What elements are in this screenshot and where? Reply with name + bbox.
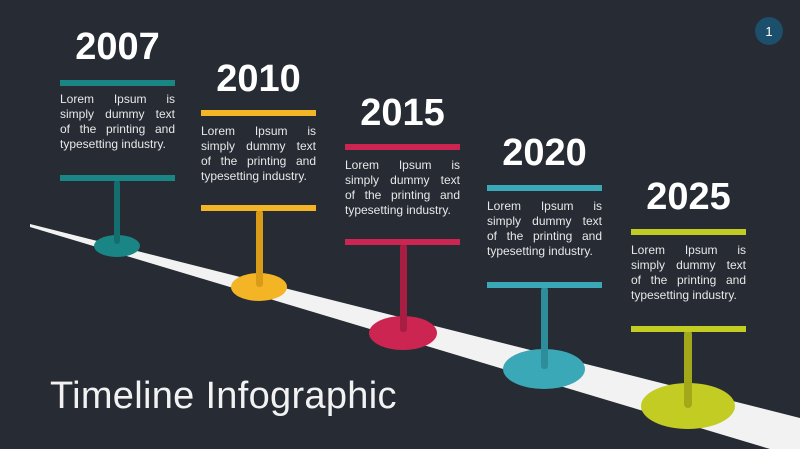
- page badge: [755, 17, 783, 45]
- column 2010: simply dummy text: [201, 139, 316, 153]
- column 2007: simply dummy text: [60, 107, 175, 121]
- page badge: 1: [765, 24, 773, 39]
- column 2015: 2015: [360, 92, 445, 134]
- column 2010: 2010: [216, 58, 301, 100]
- column 2015: typesetting industry.: [345, 203, 451, 217]
- column 2025: of the printing and: [631, 273, 746, 287]
- column 2010: typesetting industry.: [201, 169, 307, 183]
- column 2020: of the printing and: [487, 229, 602, 243]
- column 2020: simply dummy text: [487, 214, 602, 228]
- column 2007: [60, 26, 175, 181]
- column 2007: 2007: [75, 26, 160, 68]
- column 2007: of the printing and: [60, 122, 175, 136]
- column 2015: simply dummy text: [345, 173, 460, 187]
- column 2025: Lorem Ipsum is: [631, 243, 746, 257]
- marker 2007: [94, 180, 140, 257]
- column 2007: typesetting industry.: [60, 137, 166, 151]
- column 2007: Lorem Ipsum is: [60, 92, 175, 106]
- column 2025: [631, 176, 746, 332]
- road: [30, 224, 800, 449]
- column 2020: typesetting industry.: [487, 244, 593, 258]
- column 2015: [345, 92, 460, 245]
- column 2025: typesetting industry.: [631, 288, 737, 302]
- column 2020: 2020: [502, 132, 587, 174]
- marker 2010: [231, 210, 287, 301]
- column 2015: Lorem Ipsum is: [345, 158, 460, 172]
- column 2010: of the printing and: [201, 154, 316, 168]
- title: Timeline Infographic: [50, 375, 397, 417]
- marker 2015: [369, 244, 437, 350]
- column 2010: Lorem Ipsum is: [201, 124, 316, 138]
- column 2010: [201, 58, 316, 211]
- column 2020: Lorem Ipsum is: [487, 199, 602, 213]
- marker 2025: [641, 330, 735, 429]
- marker 2020: [503, 287, 585, 389]
- column 2015: of the printing and: [345, 188, 460, 202]
- column 2025: 2025: [646, 176, 731, 218]
- column 2025: simply dummy text: [631, 258, 746, 272]
- column 2020: [487, 132, 602, 288]
